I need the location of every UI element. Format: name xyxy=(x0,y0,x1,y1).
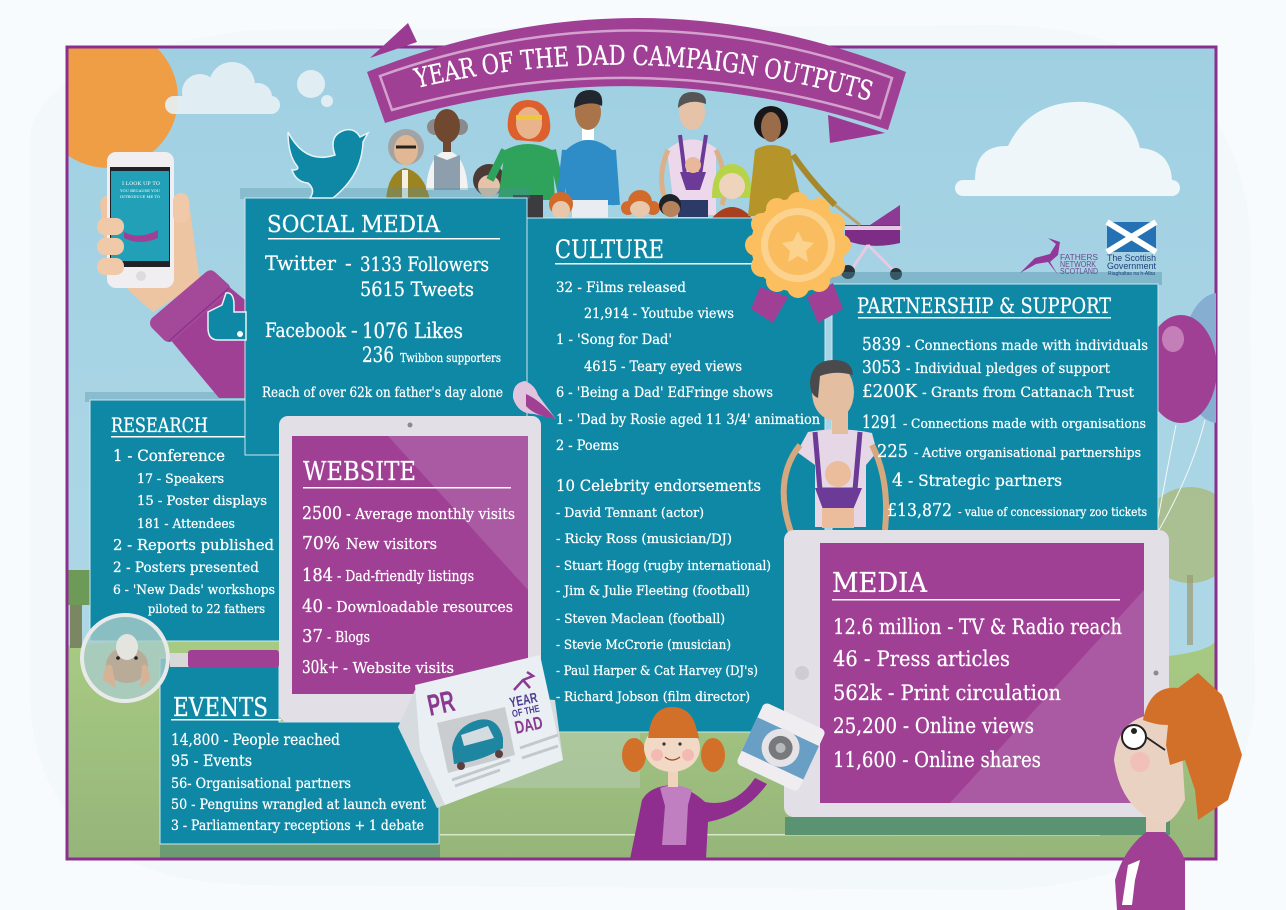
culture outputs list: 1 - 'Dad by Rosie aged 11 3/4' animation xyxy=(556,412,820,428)
partnership stats: £200K xyxy=(862,381,918,402)
masthead year of the dad: YEAR xyxy=(508,689,539,710)
phone: INTRODUCE ME TO xyxy=(120,194,161,199)
figure: girl with pigtails xyxy=(621,190,660,217)
twitter stats: 5615 Tweets xyxy=(360,277,474,301)
partnership stats: - Active organisational partnerships xyxy=(914,446,1141,461)
media stats: 562k - Print circulation xyxy=(833,681,1061,705)
celebrity endorsements list: - Stevie McCrorie (musician) xyxy=(556,638,731,653)
partnership stats: 225 xyxy=(877,441,908,462)
celebrity endorsements list: - Steven Maclean (football) xyxy=(556,612,725,627)
masthead year of the dad: OF THE xyxy=(511,704,541,720)
body xyxy=(630,778,767,859)
facebook stats: - xyxy=(351,318,358,342)
partnership stats: - Connections made with individuals xyxy=(906,338,1148,354)
figure: dark haired boy xyxy=(659,194,681,217)
celebrity endorsements list: - Richard Jobson (film director) xyxy=(556,690,750,705)
pram xyxy=(835,205,902,280)
arm holding phone xyxy=(97,152,245,398)
logo: scottish government xyxy=(1107,222,1156,277)
frame border xyxy=(67,47,1216,859)
cloud right xyxy=(955,102,1180,196)
website stats: 30k+ xyxy=(302,657,339,678)
partnership stats: - Strategic partners xyxy=(908,471,1062,490)
website stats: - Downloadable resources xyxy=(327,598,513,616)
events stats: 50 - Penguins wrangled at launch event xyxy=(171,797,426,813)
partnership stats: 5839 xyxy=(862,334,901,355)
car xyxy=(452,719,503,770)
partnership stats: 3053 xyxy=(862,357,901,378)
research list: 1 - Conference xyxy=(113,446,225,465)
logo: fathers network scotland: FATHERS xyxy=(1060,253,1098,262)
banner left flap xyxy=(370,23,417,58)
heading: website: WEBSITE xyxy=(303,457,416,487)
facebook stats: 236 xyxy=(362,343,394,367)
sun xyxy=(68,48,178,168)
website stats: 37 xyxy=(302,626,323,647)
logo: scottish government: Government xyxy=(1107,261,1156,271)
panel: events xyxy=(160,658,439,844)
panel: research xyxy=(85,392,285,641)
fingers xyxy=(97,193,189,275)
facebook stats xyxy=(265,318,501,367)
media stats xyxy=(833,615,1122,772)
celebrity endorsements list: - David Tennant (actor) xyxy=(556,506,704,521)
celebrity endorsements list: - Jim & Julie Fleeting (football) xyxy=(556,584,750,599)
banner title: YEAR OF THE DAD CAMPAIGN OUTPUTS xyxy=(412,44,873,100)
facebook stats: 1076 Likes xyxy=(362,319,463,343)
culture outputs list xyxy=(556,280,820,454)
partnership stats xyxy=(862,334,1148,521)
website stats: 2500 xyxy=(302,503,342,524)
culture outputs list: 32 - Films released xyxy=(556,280,686,296)
figure: child in green hat xyxy=(712,164,752,218)
media stats: 25,200 - Online views xyxy=(833,714,1034,738)
events stats: 14,800 - People reached xyxy=(171,730,340,749)
heading: research: RESEARCH xyxy=(111,413,208,437)
events stats: 3 - Parliamentary receptions + 1 debate xyxy=(171,818,424,834)
website stats: 70% xyxy=(302,533,340,554)
events stats xyxy=(171,730,426,834)
twitter stats: Twitter xyxy=(265,251,336,275)
hair xyxy=(622,738,646,772)
research list: 181 - Attendees xyxy=(137,517,235,532)
research list: 2 - Posters presented xyxy=(113,560,259,576)
masthead year of the dad xyxy=(508,689,545,738)
research list: piloted to 22 fathers xyxy=(148,602,265,616)
heading: culture: CULTURE xyxy=(555,235,664,264)
boy with glasses xyxy=(1114,673,1242,910)
events stats: 56- Organisational partners xyxy=(171,776,351,792)
masthead year of the dad: DAD xyxy=(513,712,545,738)
twitter stats: - xyxy=(345,251,352,275)
figure: tall father xyxy=(560,90,616,218)
partnership stats: £13,872 xyxy=(887,500,952,521)
sleeve xyxy=(169,285,245,398)
icon: twitter bird xyxy=(288,130,368,198)
media stats: 11,600 - Online shares xyxy=(833,748,1041,772)
banner body xyxy=(367,18,906,130)
hand xyxy=(100,195,200,312)
celebrity endorsements list: 10 Celebrity endorsements xyxy=(556,476,761,495)
father with baby figure xyxy=(784,360,886,535)
balloons xyxy=(1158,293,1216,530)
website stats: - Website visits xyxy=(343,659,454,677)
magnifying glass with dog xyxy=(82,615,279,701)
newspaper xyxy=(398,655,563,808)
website stats: - Dad-friendly listings xyxy=(337,567,474,585)
website stats: New visitors xyxy=(346,535,437,553)
shirt print xyxy=(1122,860,1140,905)
heading: partnership: PARTNERSHIP & SUPPORT xyxy=(857,294,1111,318)
celebrity endorsements list: - Paul Harper & Cat Harvey (DJ's) xyxy=(556,664,758,679)
title banner xyxy=(367,18,906,143)
small bird xyxy=(513,381,556,419)
logo: fathers network scotland xyxy=(1020,238,1098,276)
culture outputs list: 4615 - Teary eyed views xyxy=(584,359,742,375)
panel: culture xyxy=(527,218,825,732)
logo: scottish government: Riaghaltas na h-Alba xyxy=(1108,271,1155,277)
research list: 2 - Reports published xyxy=(113,536,274,554)
culture outputs list: 2 - Poems xyxy=(556,438,619,454)
media stats: 12.6 million - TV & Radio reach xyxy=(833,615,1122,639)
heading: events: EVENTS xyxy=(173,693,268,723)
heading: social media: SOCIAL MEDIA xyxy=(267,212,440,238)
figure: grandfather xyxy=(426,109,468,190)
partnership stats: - Individual pledges of support xyxy=(906,361,1110,377)
banner right flap xyxy=(828,115,885,143)
family group xyxy=(386,90,835,219)
figure: father with baby xyxy=(662,92,725,217)
partnership stats: - Grants from Cattanach Trust xyxy=(922,385,1134,401)
culture outputs list: 1 - 'Song for Dad' xyxy=(556,332,672,348)
celebrity endorsements list: - Stuart Hogg (rugby international) xyxy=(556,559,771,574)
website stats: - Blogs xyxy=(327,628,370,646)
masthead PR: PR xyxy=(425,685,458,723)
celebrity endorsements list xyxy=(556,476,771,705)
tablet: website xyxy=(279,416,541,722)
media stats: 46 - Press articles xyxy=(833,647,1010,671)
girl with camera xyxy=(622,702,826,859)
twitter stats: 3133 Followers xyxy=(360,252,489,276)
phone xyxy=(107,152,174,288)
research list: 15 - Poster displays xyxy=(137,494,267,509)
culture outputs list: 21,914 - Youtube views xyxy=(584,306,734,322)
culture outputs list: 6 - 'Being a Dad' EdFringe shows xyxy=(556,385,773,401)
website stats: - Average monthly visits xyxy=(346,505,515,523)
celebrity endorsements list: - Ricky Ross (musician/DJ) xyxy=(556,532,732,547)
website stats: 184 xyxy=(302,565,333,586)
facebook stats: Twibbon supporters xyxy=(400,351,501,365)
shadows under panels xyxy=(160,844,440,858)
logo: scottish government: The Scottish xyxy=(1107,253,1156,263)
figure: red haired boy xyxy=(549,192,573,219)
figure: red haired mother xyxy=(490,100,562,218)
partnership stats: 1291 xyxy=(862,412,898,433)
tablet: media xyxy=(784,530,1169,817)
panel: partnership and support xyxy=(826,272,1162,540)
heading: media: MEDIA xyxy=(832,568,927,599)
reach note: Reach of over 62k on father's day alone xyxy=(262,385,503,401)
website stats: 40 xyxy=(302,596,323,617)
camera xyxy=(736,702,826,792)
panel: social media xyxy=(240,188,530,455)
events stats: 95 - Events xyxy=(171,751,252,770)
partnership stats: - value of concessionary zoo tickets xyxy=(958,505,1147,519)
figure: grandmother xyxy=(386,129,430,200)
logo: fathers network scotland: SCOTLAND xyxy=(1060,267,1098,276)
research list: 6 - 'New Dads' workshops xyxy=(113,583,275,598)
research list: 17 - Speakers xyxy=(137,472,224,487)
partnership stats: - Connections made with organisations xyxy=(903,417,1146,432)
medal xyxy=(745,192,851,323)
logo: fathers network scotland: NETWORK xyxy=(1060,260,1097,269)
figure: dark haired child xyxy=(473,164,505,205)
phone: YOU BECAUSE YOU xyxy=(119,188,161,193)
partnership stats: 4 xyxy=(892,470,903,491)
cloud left xyxy=(165,62,333,114)
research list xyxy=(113,446,275,616)
website stats xyxy=(302,503,515,678)
facebook stats: Facebook xyxy=(265,318,347,342)
figure: pregnant mother xyxy=(748,106,835,216)
icon: thumbs up xyxy=(208,293,246,340)
phone: I LOOK UP TO xyxy=(122,181,160,187)
twitter stats xyxy=(265,251,489,301)
